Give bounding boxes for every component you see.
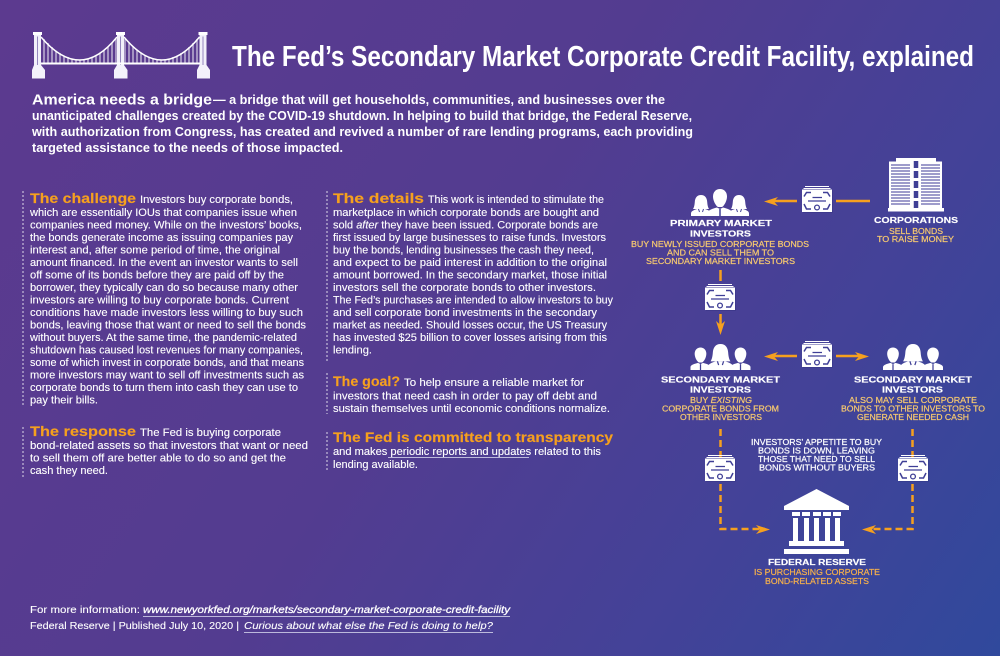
text: the details body: marketplace in which corporate bonds are bought and <box>333 207 599 219</box>
flow diagram <box>631 158 985 586</box>
arrow: primary to secondary <box>716 270 725 335</box>
text: transparency body: and makes periodic reports and updates related to this <box>333 446 601 458</box>
text: the response body: to sell them off are better able to do so and get the <box>30 452 286 464</box>
heading: transparency: The Fed is committed to transparency <box>333 430 614 445</box>
text: the challenge body: borrower, they typically can do so because many other <box>30 282 298 294</box>
label: secondary investors right <box>841 376 985 422</box>
heading: the details: The details <box>333 191 424 206</box>
footer: For more information: <box>30 604 140 616</box>
text: transparency body <box>333 446 601 471</box>
label: primary market investors <box>631 219 809 266</box>
text: the challenge body: Investors buy corporate bonds, <box>140 194 293 206</box>
text: the response body: bond-related assets so that investors that want or need <box>30 440 308 452</box>
intro text: targeted assistance to the needs of those impacted. <box>32 141 343 155</box>
text: the challenge body: shutdown has caused lost revenues for many companies, <box>30 344 303 356</box>
label: federal reserve: IS PURCHASING CORPORATE <box>754 568 880 577</box>
text: the challenge body: off some of its bonds before they are paid off by the <box>30 270 284 282</box>
text: the challenge body: investors are willing to buy corporate bonds. Current <box>30 294 289 306</box>
arrow: right secondary to fed <box>862 429 912 534</box>
label: secondary investors right: SECONDARY MARKET <box>854 376 972 384</box>
label: federal reserve: BOND-RELATED ASSETS <box>765 577 869 586</box>
label: secondary investors right: ALSO MAY SELL CORPORATE <box>849 396 977 405</box>
text: the challenge body: some of which invest in corporate bonds, and that means <box>30 357 304 369</box>
text: the challenge body: without buyers. At the same time, the pandemic-related <box>29 332 297 344</box>
footer: Federal Reserve | Published July 10, 2020 | <box>30 620 239 632</box>
icon: federal reserve building <box>784 489 849 554</box>
arrow: left secondary to fed <box>720 429 770 534</box>
panel: the response <box>23 424 308 478</box>
text: the goal body: To help ensure a reliable market for <box>404 377 584 389</box>
arrow: secondary left exchange <box>764 352 797 361</box>
text: the details body: lending. <box>333 344 372 356</box>
text: the details body: This work is intended to stimulate the <box>428 194 604 206</box>
text: the details body: amount borrowed. In the secondary market, those initial <box>333 270 607 282</box>
panel: the challenge <box>23 191 306 407</box>
label: secondary investors left: CORPORATE BONDS FROM <box>662 404 779 414</box>
label: secondary investors right: INVESTORS <box>882 386 944 394</box>
label: primary market investors: PRIMARY MARKET <box>670 219 772 228</box>
text: the challenge body <box>29 194 306 406</box>
text: the challenge body: the bonds generate income as issuing companies pay <box>30 232 293 244</box>
label: corporations: CORPORATIONS <box>874 216 959 225</box>
label: federal reserve: FEDERAL RESERVE <box>768 558 867 567</box>
icon: suspension bridge <box>32 32 210 78</box>
icon: bond certificate 4 <box>705 455 736 482</box>
callout: appetite down: BONDS IS DOWN, LEAVING <box>758 446 875 456</box>
intro text: — a bridge that will get households, communities, and businesses over the <box>213 93 665 107</box>
text: the goal body: sustain themselves until economic conditions normalize. <box>333 403 610 415</box>
text: the challenge body: interest and, after some period of time, the original <box>30 244 280 256</box>
label: secondary investors left: OTHER INVESTORS <box>680 413 762 422</box>
text: the challenge body: more investors may want to sell off investments such as <box>30 370 304 382</box>
text: the challenge body: which are essentially IOUs that companies issue when <box>29 207 297 219</box>
icon: bond certificate 2 <box>705 284 736 311</box>
label: secondary investors left: INVESTORS <box>690 386 752 394</box>
intro text: America needs a bridge <box>32 92 212 108</box>
text: the response body: The Fed is buying corporate <box>140 427 281 439</box>
label: primary market investors: AND CAN SELL THEM TO <box>667 248 774 258</box>
callout: appetite down: THOSE THAT NEED TO SELL <box>758 455 876 464</box>
footer: www.newyorkfed.org/markets/secondary-market-corporate-credit-facility <box>143 604 511 616</box>
text: the details body <box>333 194 613 356</box>
icon: bond certificate 1 <box>802 186 833 213</box>
footer <box>30 604 511 633</box>
text: the details body: buy the bonds, lending businesses the cash they need, <box>333 244 594 256</box>
heading: the response: The response <box>30 424 137 439</box>
label: secondary investors left: SECONDARY MARKET <box>661 376 780 384</box>
intro text <box>31 92 693 155</box>
icon: bond certificate 5 <box>898 455 929 482</box>
label: corporations: SELL BONDS <box>889 227 943 236</box>
text: the response body <box>30 427 308 477</box>
text: the details body: market as needed. Should losses occur, the US Treasury <box>333 320 607 332</box>
text: the details body: and sell corporate bond investments in the secondary <box>333 307 597 319</box>
label: corporations <box>874 216 959 244</box>
intro text: unanticipated challenges created by the COVID-19 shutdown. In helping to build that bridge, the Federal Reserve, <box>32 109 692 123</box>
text: the details body: investors sell the corporate bonds to other investors. <box>333 282 596 294</box>
label: primary market investors: INVESTORS <box>690 230 752 238</box>
text: the goal body <box>333 377 610 415</box>
icon: secondary investors right <box>883 344 943 370</box>
panel: transparency <box>327 430 614 471</box>
label: federal reserve <box>754 558 880 586</box>
text: the details body: The Fed’s purchases are intended to allow investors to buy <box>333 294 613 306</box>
label: secondary investors right: BONDS TO OTHER INVESTORS TO <box>841 404 985 414</box>
icon: primary investors <box>691 189 749 216</box>
label: primary market investors: BUY NEWLY ISSUED CORPORATE BONDS <box>631 240 809 249</box>
footer: Curious about what else the Fed is doing to help? <box>244 620 493 632</box>
text: the challenge body: corporate bonds to turn them into cash they can use to <box>30 382 298 394</box>
label: secondary investors left: BUY EXISTING <box>690 396 752 405</box>
panel: the goal <box>327 373 610 415</box>
text: the challenge body: pay their bills. <box>30 394 98 406</box>
heading: the challenge: The challenge <box>30 191 137 206</box>
arrow: corporations to primary <box>764 197 870 206</box>
text: the details body: has invested $25 billion to cover losses arising from this <box>333 332 608 344</box>
callout: appetite down: BONDS WITHOUT BUYERS <box>759 464 875 472</box>
text: the response body: cash they need. <box>30 465 108 477</box>
text: the challenge body: conditions have made investors less willing to buy such <box>30 307 303 319</box>
text: the details body: sold after they have been issued. Corporate bonds are <box>333 220 598 232</box>
text: the challenge body: companies need money. While on the investors’ books, <box>30 220 302 232</box>
icon: corporate building <box>888 158 944 212</box>
text: transparency body: lending available. <box>333 459 418 471</box>
text: the goal body: investors that need cash in order to pay off debt and <box>333 390 597 402</box>
icon: secondary investors left <box>690 344 750 370</box>
text: the challenge body: amount financed. In the event an investor wants to sell <box>30 257 298 269</box>
callout: appetite down <box>751 438 883 472</box>
text: the challenge body: bonds, leaving those that want or need to sell the bonds <box>30 320 306 332</box>
intro text: with authorization from Congress, has created and revived a number of rare lending programs, each providing <box>31 125 693 139</box>
label: secondary investors right: GENERATE NEEDED CASH <box>857 413 969 422</box>
arrow: secondary right exchange <box>836 352 869 361</box>
label: corporations: TO RAISE MONEY <box>877 235 955 244</box>
heading: the goal: The goal? <box>333 374 400 389</box>
label: secondary investors left <box>661 376 780 422</box>
icon: bond certificate 3 <box>802 341 833 368</box>
label: primary market investors: SECONDARY MARKET INVESTORS <box>646 257 795 266</box>
text: the details body: and expect to be paid interest in addition to the original <box>333 257 607 269</box>
text: the details body: first issued by large businesses to raise funds. Investors <box>333 232 606 244</box>
callout: appetite down: INVESTORS’ APPETITE TO BUY <box>751 438 883 447</box>
panel: the details <box>327 191 613 361</box>
